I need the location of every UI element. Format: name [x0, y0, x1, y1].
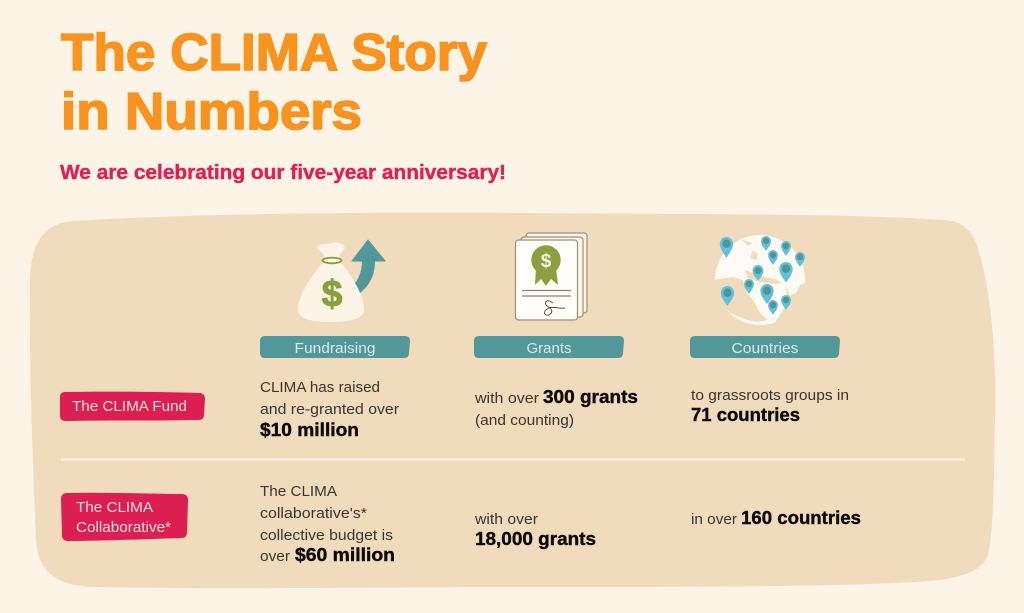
row 1 grants text: 300 grants	[543, 387, 638, 407]
row 1 fundraising text: and re-granted over	[260, 401, 399, 418]
title: The CLIMA Story	[61, 24, 487, 82]
row 2 countries text	[691, 508, 861, 528]
row 2 grants text: 18,000 grants	[475, 529, 596, 549]
row 2 fundraising text: over	[260, 548, 290, 565]
panel: statistics table	[30, 213, 995, 588]
column header: Fundraising	[260, 336, 410, 358]
row 2 fundraising text: collective budget is	[260, 527, 393, 544]
row 1 grants text: with over	[474, 390, 539, 407]
row 2 fundraising text: $60 million	[295, 545, 395, 565]
row 2 countries text: 160 countries	[741, 508, 861, 528]
row 2 grants text	[474, 511, 596, 549]
icon: money bag with arrow: $	[322, 273, 343, 314]
row 2 countries text: in over	[691, 511, 737, 528]
icon: grant certificates	[516, 233, 587, 320]
title: in Numbers	[61, 83, 362, 141]
row 1 countries text: to grassroots groups in	[691, 387, 849, 404]
column header: Countries	[690, 336, 840, 358]
row 1 grants text	[474, 387, 638, 429]
subtitle: We are celebrating our five-year anniversary!	[60, 162, 506, 184]
column header: Fundraising: Fundraising	[294, 340, 376, 357]
row label: The CLIMA Fund	[60, 392, 205, 421]
row 1 grants text: (and counting)	[475, 412, 574, 429]
row 1 fundraising text: CLIMA has raised	[260, 379, 380, 396]
row 1 countries text: 71 countries	[691, 405, 800, 425]
row label: The CLIMA Collaborative: Collaborative*	[76, 519, 171, 536]
icon: globe with map pins	[712, 235, 808, 325]
row 2 fundraising text	[260, 483, 395, 565]
row 1 fundraising text: $10 million	[260, 420, 359, 440]
column header: Countries: Countries	[732, 340, 798, 357]
title	[61, 24, 487, 141]
column header: Grants	[474, 336, 624, 358]
row 1 countries text	[691, 387, 849, 425]
row 2 grants text: with over	[474, 511, 538, 528]
row label: The CLIMA Fund: The CLIMA Fund	[72, 398, 187, 415]
row label: The CLIMA Collaborative: The CLIMA	[76, 499, 153, 516]
row 1 fundraising text	[260, 379, 399, 440]
row 2 fundraising text: The CLIMA	[260, 483, 337, 500]
icon: money bag with arrow	[298, 240, 385, 322]
icon: grant certificates: $	[541, 251, 552, 272]
row label: The CLIMA Collaborative	[61, 493, 188, 541]
column header: Grants: Grants	[526, 340, 572, 357]
row 2 fundraising text: collaborative's*	[260, 505, 367, 522]
